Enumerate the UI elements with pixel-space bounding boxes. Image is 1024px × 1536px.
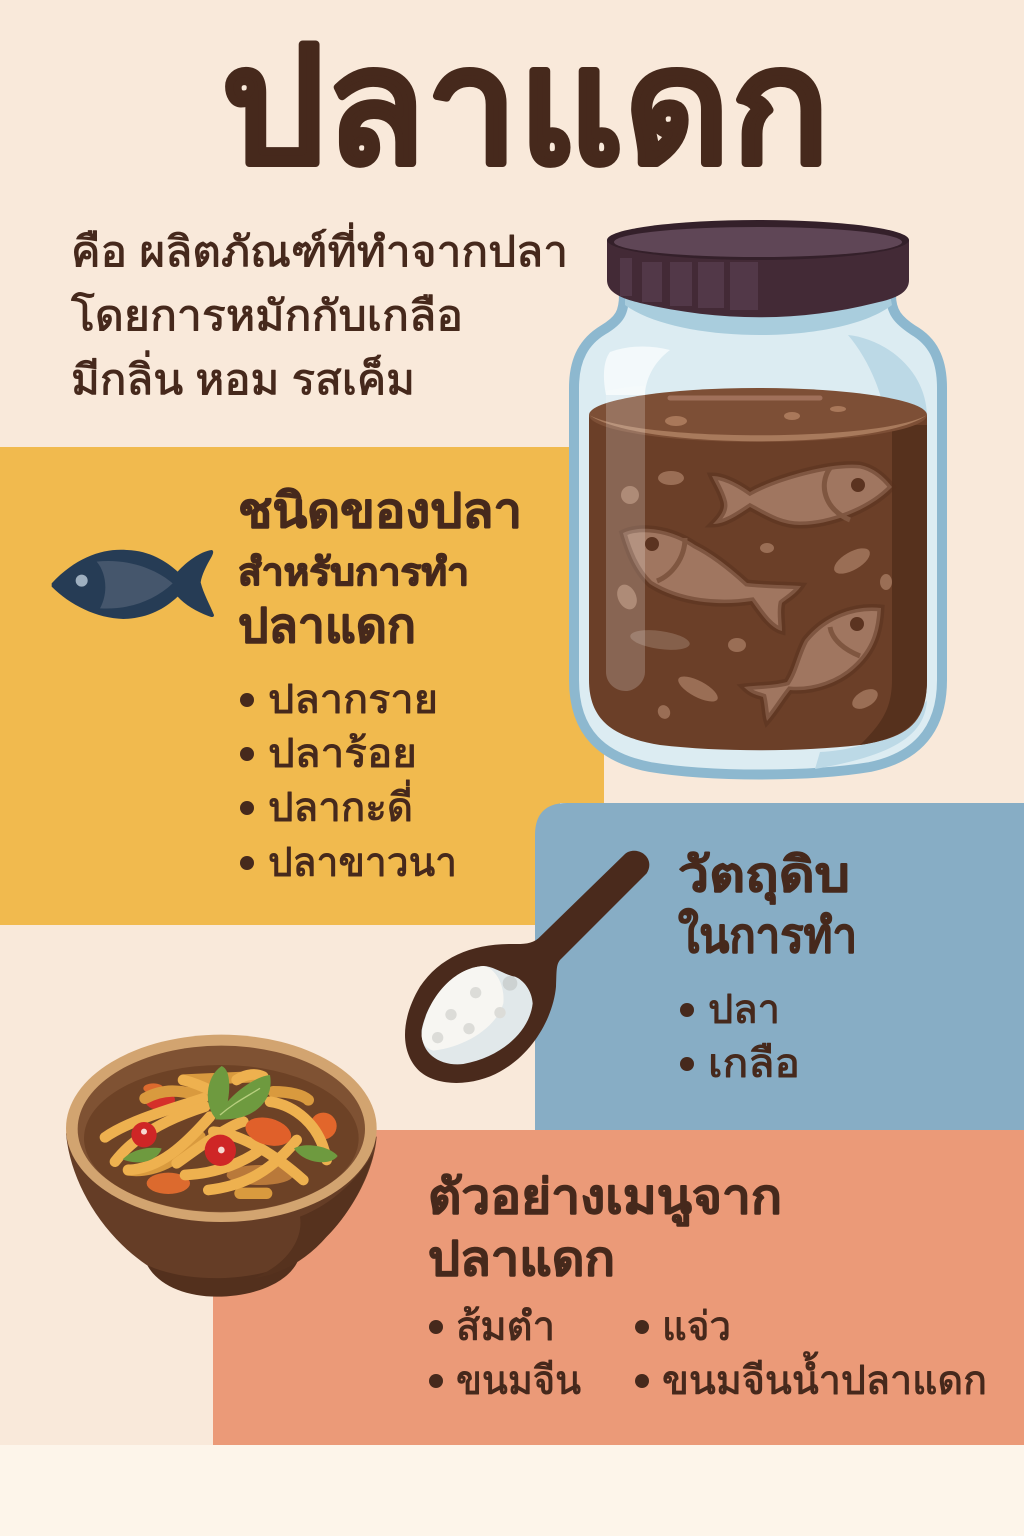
jar floating pieces <box>613 471 892 721</box>
jar glass <box>574 295 942 774</box>
icon: jar of fermented fish <box>574 220 942 774</box>
heading: menu examples: ตัวอย่างเมนูจาก <box>428 1171 782 1226</box>
icon: fish <box>52 550 214 619</box>
heading: ingredients: วัตถุดิบ <box>678 849 850 904</box>
food toppings <box>105 1074 337 1194</box>
jar lid <box>607 220 909 317</box>
list: ingredients: ปลา <box>708 988 780 1032</box>
heading: ingredients <box>678 849 857 963</box>
intro text: คือ ผลิตภัณฑ์ที่ทำจากปลา <box>71 223 568 275</box>
jar contents <box>589 415 927 750</box>
panel: ingredients background <box>535 803 1024 1130</box>
heading: fish types: สำหรับการทำ <box>238 552 469 594</box>
icon: spoon with salt <box>405 851 649 1083</box>
list: menu examples: แจ่ว <box>662 1305 731 1349</box>
list: fish types: ปลากะดี่ <box>268 780 413 830</box>
heading: menu examples: ปลาแดก <box>428 1233 615 1286</box>
list: ingredients <box>680 988 800 1086</box>
heading: ingredients: ในการทำ <box>678 908 857 963</box>
title: ปลาแดก <box>221 15 830 198</box>
list: ingredients: เกลือ <box>708 1042 800 1086</box>
leaves <box>123 1066 338 1162</box>
list: fish types: ปลาร้อย <box>268 732 417 776</box>
fish one in jar <box>712 465 892 525</box>
list: menu examples: ส้มตำ <box>456 1305 555 1349</box>
list: menu examples: ขนมจีนน้ำปลาแดก <box>662 1351 987 1403</box>
list: fish types: ปลากราย <box>268 678 438 722</box>
heading: fish types: ปลาแดก <box>238 600 416 653</box>
heading: fish types: ชนิดของปลา <box>238 485 522 538</box>
jar highlight <box>606 386 645 691</box>
list: fish types <box>240 678 457 885</box>
intro text <box>71 223 568 403</box>
icon: bowl of food <box>66 1035 377 1297</box>
fish two in jar <box>623 529 801 631</box>
intro text: มีกลิ่น หอม รสเค็ม <box>71 351 415 403</box>
list: fish types: ปลาขาวนา <box>268 841 457 885</box>
heading: fish types <box>238 485 522 653</box>
list: menu examples <box>429 1305 987 1403</box>
list: menu examples: ขนมจีน <box>456 1359 581 1403</box>
intro text: โดยการหมักกับเกลือ <box>71 291 463 339</box>
panel: menu examples background <box>213 1130 1024 1445</box>
fish three in jar <box>744 607 881 721</box>
heading: menu examples <box>428 1171 782 1286</box>
panel: fish types background <box>0 447 604 925</box>
